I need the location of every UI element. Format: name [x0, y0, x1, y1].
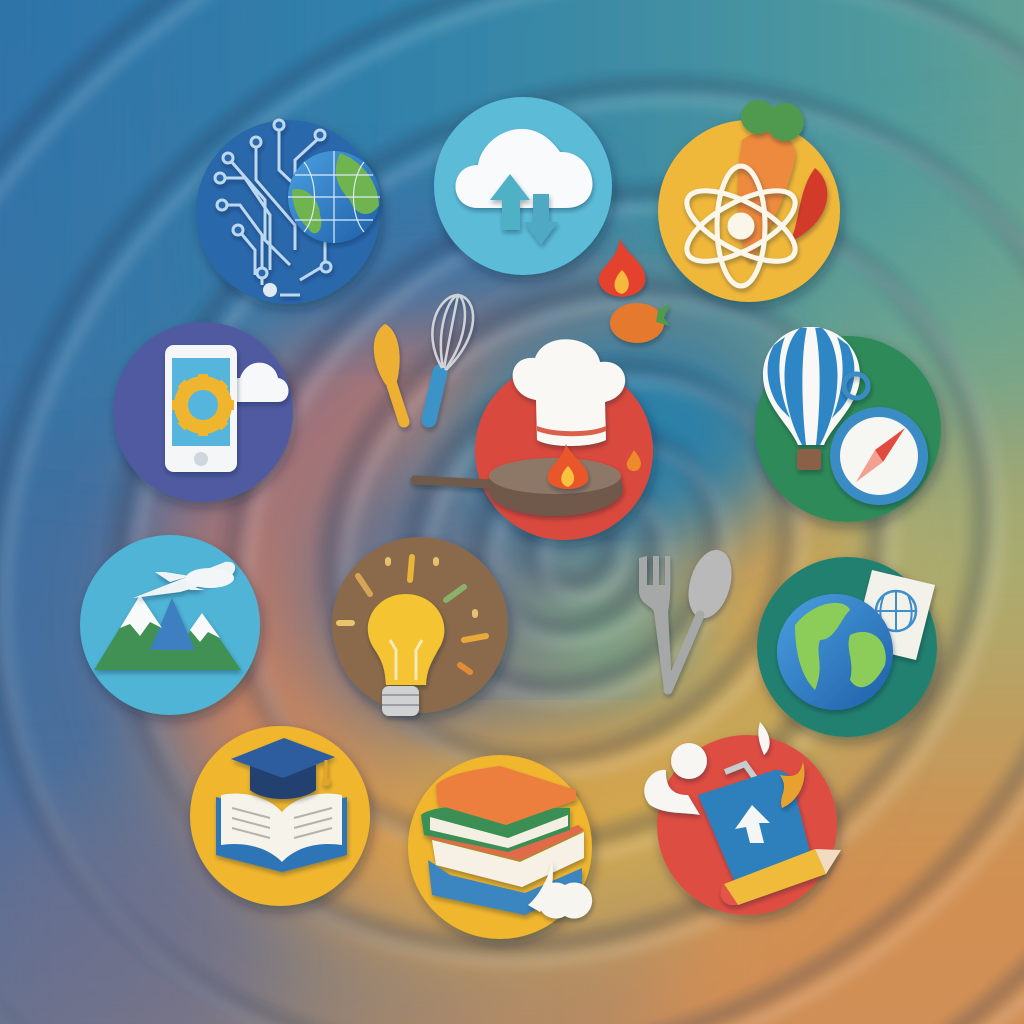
- book stack: [421, 766, 584, 915]
- icon: cloud with arrows: [434, 97, 612, 275]
- figure: [528, 860, 592, 918]
- icon: open book and cap: [190, 726, 370, 906]
- book: [216, 794, 347, 872]
- icon: whisk: [429, 295, 473, 420]
- icon: backpack, pencil and figure: [644, 722, 841, 915]
- icon: balloon and compass: [755, 327, 941, 522]
- cloud: [227, 363, 288, 402]
- pencil: [721, 849, 841, 905]
- atom: [677, 166, 805, 286]
- figure: [644, 722, 770, 815]
- pan flame: [548, 444, 588, 489]
- down arrow: [524, 194, 558, 245]
- mountains: [94, 595, 241, 670]
- leaves: [741, 100, 804, 141]
- globe: [777, 594, 893, 710]
- sparks: [339, 557, 486, 672]
- icon: globe and passport: [757, 557, 937, 737]
- icon: chef hat and pan: [415, 339, 653, 540]
- icon: plane and mountains: [80, 535, 260, 715]
- flame: [780, 762, 804, 808]
- icon: spatula: [374, 324, 404, 422]
- gear: [159, 361, 247, 449]
- circuit traces: [215, 120, 331, 295]
- phone: [165, 345, 237, 472]
- chili: [790, 168, 827, 242]
- cloud: [456, 129, 592, 208]
- hat: [513, 339, 625, 446]
- up arrow: [490, 174, 530, 230]
- icon: fork and spoon: [639, 545, 739, 690]
- bulb: [368, 594, 444, 716]
- compass: [830, 374, 928, 505]
- globe: [288, 151, 380, 243]
- pan: [415, 458, 623, 516]
- cap: [231, 738, 335, 799]
- icon: circuit globe: [196, 120, 380, 304]
- icon: flame with tomato: [599, 238, 670, 343]
- icon: stacked books: [408, 755, 592, 939]
- backpack: [698, 764, 812, 890]
- icon: light bulb: [332, 537, 508, 716]
- small flame: [627, 450, 641, 471]
- passport: [853, 570, 935, 660]
- plane: [133, 562, 235, 598]
- icon: atom and carrot: [658, 100, 840, 302]
- carrot: [737, 132, 795, 262]
- balloon: [763, 327, 860, 470]
- icon: phone with gear: [113, 322, 293, 502]
